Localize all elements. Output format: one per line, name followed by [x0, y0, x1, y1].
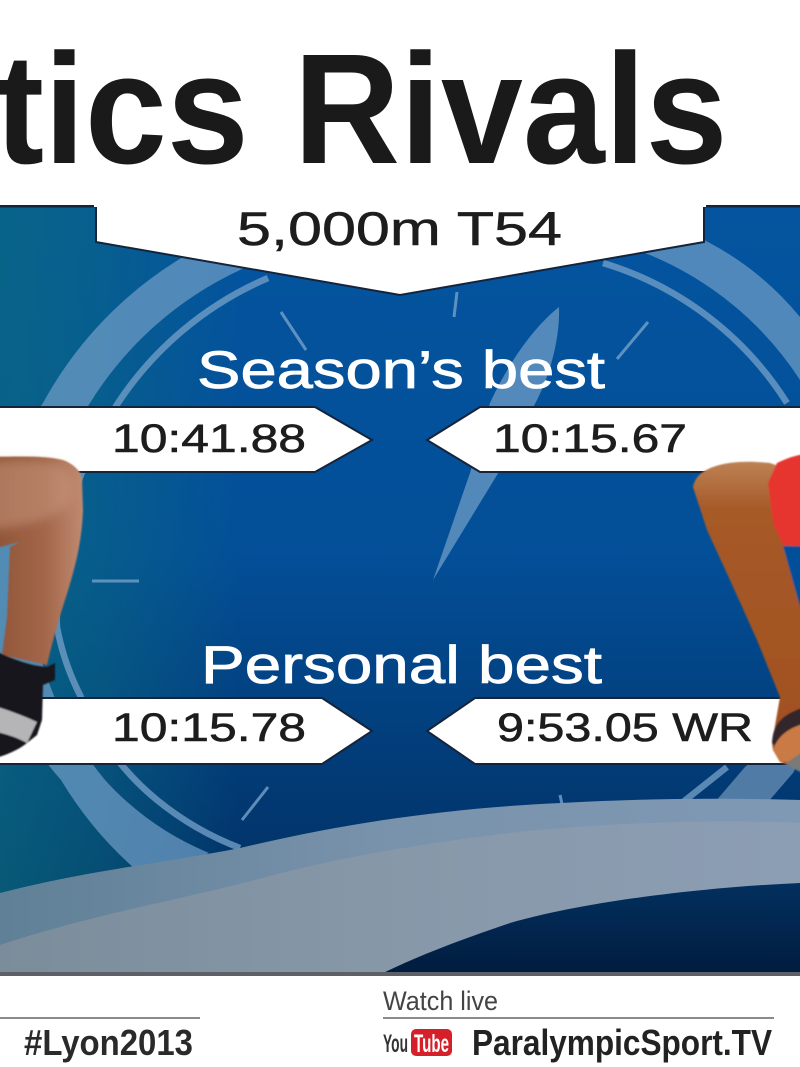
athlete right: red shorts: [768, 453, 800, 547]
panel top rule: [0, 205, 800, 208]
footer: right rule: [383, 1017, 774, 1019]
dial: wide ring lower right: [718, 765, 796, 800]
time bar: left season's best: 10:41.88: [112, 417, 306, 461]
panel bottom rule: [0, 972, 800, 976]
dial: needle: [433, 307, 559, 580]
time bar: right season's best: [427, 407, 800, 472]
footer: hashtag: #Lyon2013: [24, 1022, 193, 1063]
dial: wide ring: [0, 240, 800, 866]
banner: event name: 5,000m T54: [237, 202, 562, 255]
time bar: right season's best: 10:15.67: [493, 417, 687, 461]
footer: watch live: Watch live: [383, 986, 498, 1016]
athlete left: shoe stripe: [0, 704, 37, 743]
title: tics Rivals: [0, 22, 728, 197]
heading: personal best: Personal best: [201, 636, 602, 695]
athlete right: gap behind calf: [783, 546, 800, 612]
athlete left: sock and shoe: [0, 648, 55, 760]
athlete left: leg: [0, 456, 83, 760]
athlete right: hand: [773, 722, 800, 762]
wave: dark corner: [383, 883, 800, 973]
time bar: left season's best: [0, 407, 372, 472]
footer: left rule: [0, 1017, 200, 1019]
athlete right: leg: [693, 453, 800, 778]
heading: season's best: Season’s best: [197, 341, 605, 400]
athlete right: wristband: [772, 705, 800, 748]
icon: YouTube logo: Tube: [414, 1030, 449, 1058]
wave: upper band: [0, 798, 800, 945]
icon: YouTube logo: You: [383, 1030, 408, 1058]
time bar: right personal best: 9:53.05 WR: [497, 706, 753, 750]
time bar: left personal best: [0, 698, 372, 764]
banner: event name: [94, 195, 706, 295]
athlete right: grey glove: [785, 745, 800, 778]
wave: lower band: [0, 821, 800, 973]
athlete left: thigh highlight: [0, 461, 73, 530]
panel: blue dial background: [0, 178, 800, 975]
time bar: left personal best: 10:15.78: [112, 706, 306, 750]
icon: YouTube logo: [383, 1029, 452, 1058]
dial: tick marks: [92, 292, 648, 820]
time bar: right personal best: [427, 698, 800, 764]
dial: thin ring: [56, 263, 787, 848]
